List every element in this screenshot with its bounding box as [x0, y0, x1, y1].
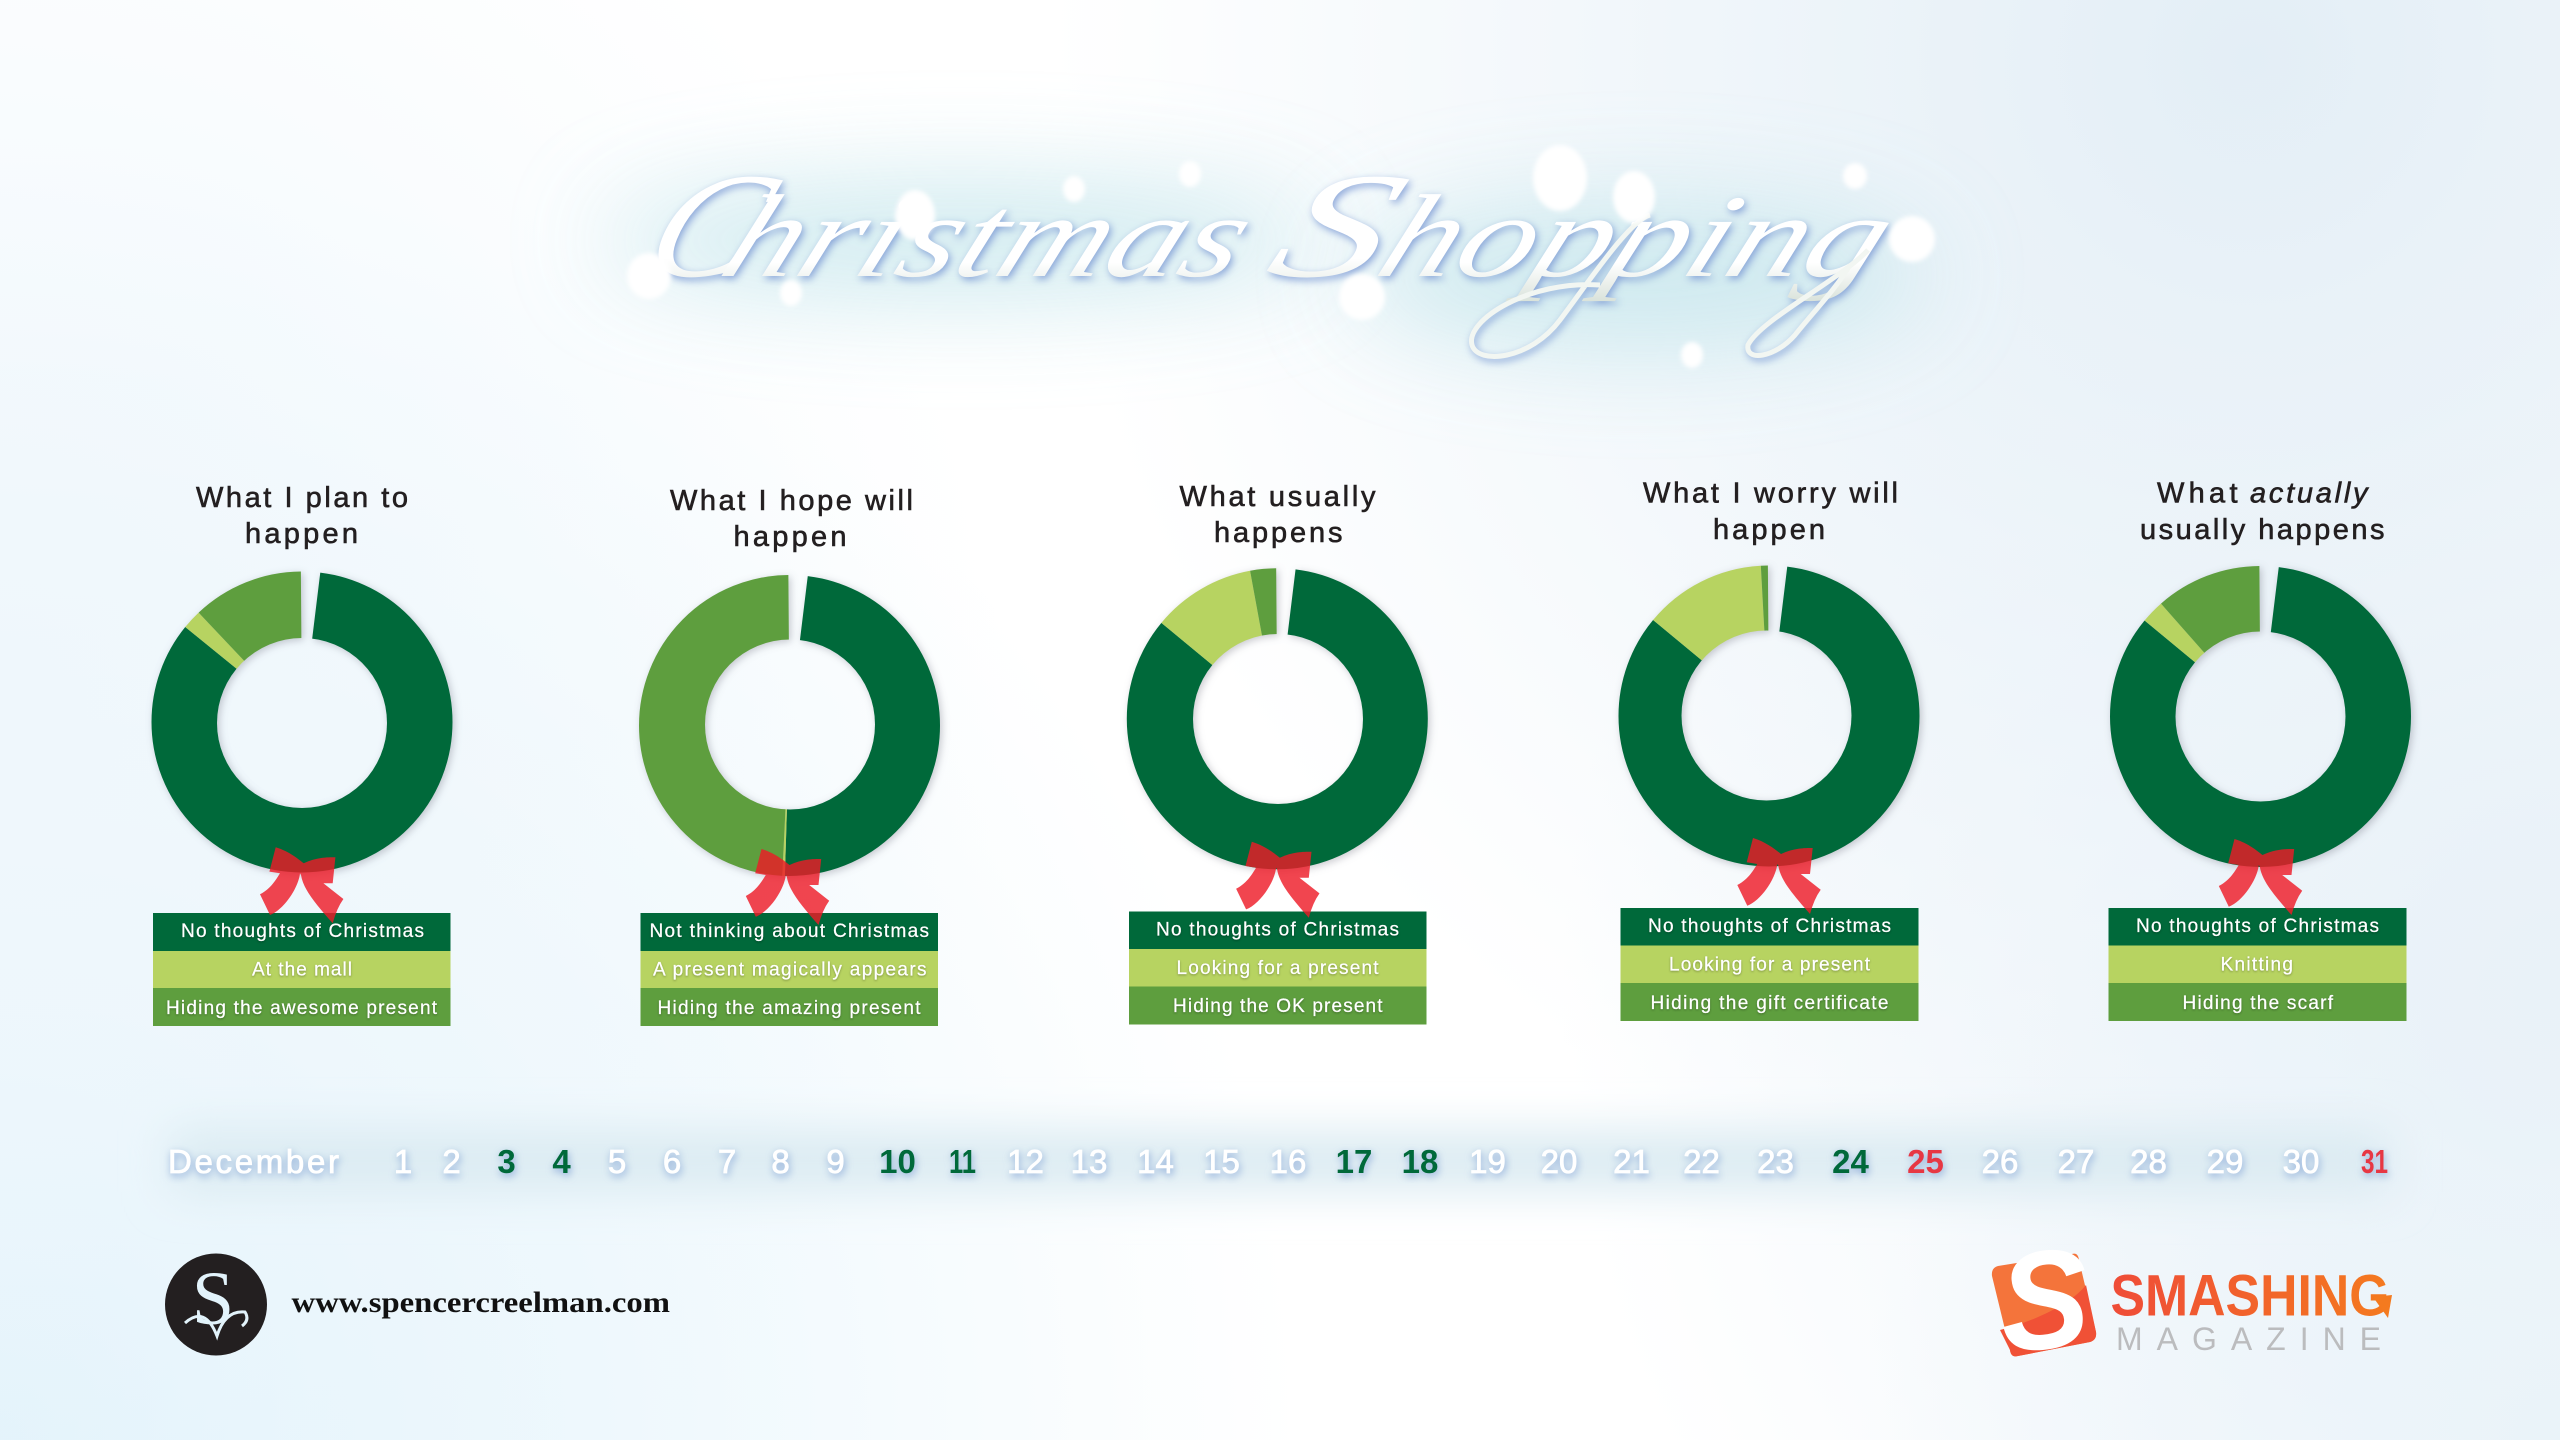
- calendar: December dates: 30: [2283, 1143, 2319, 1180]
- heading: [1180, 481, 1376, 549]
- legend: [640, 913, 938, 1026]
- calendar: December dates: 16: [1270, 1143, 1306, 1180]
- legend: [153, 913, 450, 1026]
- legend: Hiding the amazing present: [658, 998, 921, 1019]
- calendar: December dates: 31: [2361, 1143, 2388, 1180]
- calendar: December dates: 2: [442, 1143, 461, 1180]
- calendar: December dates: [168, 1143, 2388, 1180]
- heading: What I worry will: [1643, 478, 1898, 510]
- tagline: MAGAZINE: [2116, 1321, 2381, 1357]
- calendar: December dates: 1: [394, 1143, 412, 1180]
- calendar: December dates: 29: [2207, 1143, 2243, 1180]
- legend: Looking for a present: [1669, 954, 1871, 976]
- legend: Hiding the scarf: [2182, 993, 2334, 1014]
- panel: what I hope will happen: [640, 485, 938, 1026]
- calendar: December dates: 22: [1683, 1143, 1720, 1180]
- title: Christmas Shopping: hristmas: [706, 171, 1273, 302]
- calendar: December dates: 3: [497, 1143, 516, 1180]
- title: Christmas Shopping: S: [1249, 142, 1428, 309]
- donut chart: [1694, 641, 1844, 791]
- donut chart: [1202, 644, 1353, 794]
- calendar: December dates: 17: [1336, 1143, 1372, 1180]
- calendar: December dates: 27: [2058, 1143, 2094, 1180]
- legend: [1620, 908, 1918, 1021]
- legend: No thoughts of Christmas: [181, 921, 424, 942]
- calendar: December dates: 26: [1982, 1143, 2018, 1180]
- heading: usually happens: [2140, 514, 2384, 546]
- heading: happens: [1214, 517, 1342, 549]
- calendar: December dates: 19: [1469, 1143, 1506, 1180]
- heading: What I plan to: [196, 482, 408, 514]
- legend: No thoughts of Christmas: [2136, 916, 2379, 937]
- icon: red bow: [746, 849, 829, 925]
- legend: No thoughts of Christmas: [1648, 916, 1891, 937]
- legend: At the mall: [252, 960, 352, 980]
- panel: what I plan to happen: [153, 482, 450, 1026]
- title: Christmas Shopping: C: [625, 142, 799, 309]
- calendar: December dates: 13: [1071, 1143, 1107, 1180]
- legend: Not thinking about Christmas: [650, 921, 929, 942]
- heading: actually: [2250, 478, 2369, 510]
- calendar: December dates: 9: [826, 1143, 845, 1180]
- calendar: December dates: 28: [2130, 1143, 2167, 1180]
- website url: www.spencercreelman.com: [292, 1286, 670, 1319]
- logo: Spencer Creelman monogram: S: [192, 1257, 234, 1341]
- heading: [670, 485, 913, 553]
- heading: [196, 482, 408, 550]
- logo: Spencer Creelman monogram: [165, 1254, 267, 1356]
- legend: [1129, 912, 1426, 1024]
- calendar: December dates: 24: [1832, 1143, 1869, 1180]
- heading: happen: [1713, 514, 1825, 546]
- calendar: December dates: 18: [1402, 1143, 1438, 1180]
- donut chart: [2185, 641, 2336, 792]
- calendar: December dates: 25: [1907, 1143, 1944, 1180]
- heading: happen: [734, 521, 846, 553]
- calendar: December dates: 20: [1541, 1143, 1577, 1180]
- title: Christmas Shopping: [625, 142, 1926, 356]
- heading: What usually: [1180, 481, 1376, 513]
- snow bokeh: [627, 145, 1935, 368]
- calendar: December dates: 12: [1007, 1143, 1044, 1180]
- legend: Hiding the awesome present: [166, 998, 438, 1019]
- heading: [1643, 478, 1898, 546]
- heading: happen: [245, 518, 358, 550]
- calendar: December dates: 10: [879, 1143, 916, 1180]
- legend: No thoughts of Christmas: [1156, 920, 1399, 940]
- calendar: December dates: 14: [1137, 1143, 1174, 1180]
- donut chart: [227, 647, 377, 797]
- heading: What: [2157, 478, 2238, 510]
- legend: Hiding the gift certificate: [1650, 993, 1888, 1014]
- calendar: December dates: 23: [1757, 1143, 1794, 1180]
- calendar: December dates: 11: [949, 1143, 976, 1180]
- calendar: December dates: 21: [1613, 1143, 1650, 1180]
- icon: red bow: [1737, 838, 1821, 914]
- calendar: December dates: 15: [1203, 1143, 1240, 1180]
- calendar: December dates: 6: [663, 1143, 681, 1180]
- heading: [2140, 478, 2384, 546]
- wordmark: SMASHING: [2110, 1264, 2390, 1328]
- icon: red bow: [2219, 839, 2302, 915]
- donut chart: [714, 650, 865, 801]
- panel: what actually usually happens: [2108, 478, 2406, 1021]
- calendar: December dates: December: [168, 1143, 339, 1180]
- logo: Smashing Magazine: [1992, 1218, 2392, 1382]
- calendar: December dates: 8: [771, 1143, 790, 1180]
- panel: what usually happens: [1129, 481, 1426, 1024]
- title: Christmas Shopping: hopping: [1362, 171, 1914, 302]
- legend: Hiding the OK present: [1173, 996, 1383, 1017]
- legend: Looking for a present: [1176, 958, 1379, 979]
- icon: red bow: [260, 847, 343, 923]
- icon: tilted S badge: S: [1993, 1218, 2095, 1382]
- panel: what I worry will happen: [1620, 478, 1918, 1021]
- legend: A present magically appears: [653, 960, 926, 980]
- calendar: December dates: 5: [608, 1143, 626, 1180]
- legend: [2108, 908, 2406, 1021]
- legend: Knitting: [2220, 954, 2293, 976]
- heading: What I hope will: [670, 485, 913, 517]
- icon: red bow: [1236, 842, 1320, 918]
- calendar: December dates: 7: [718, 1143, 736, 1180]
- calendar: December dates: 4: [552, 1143, 571, 1180]
